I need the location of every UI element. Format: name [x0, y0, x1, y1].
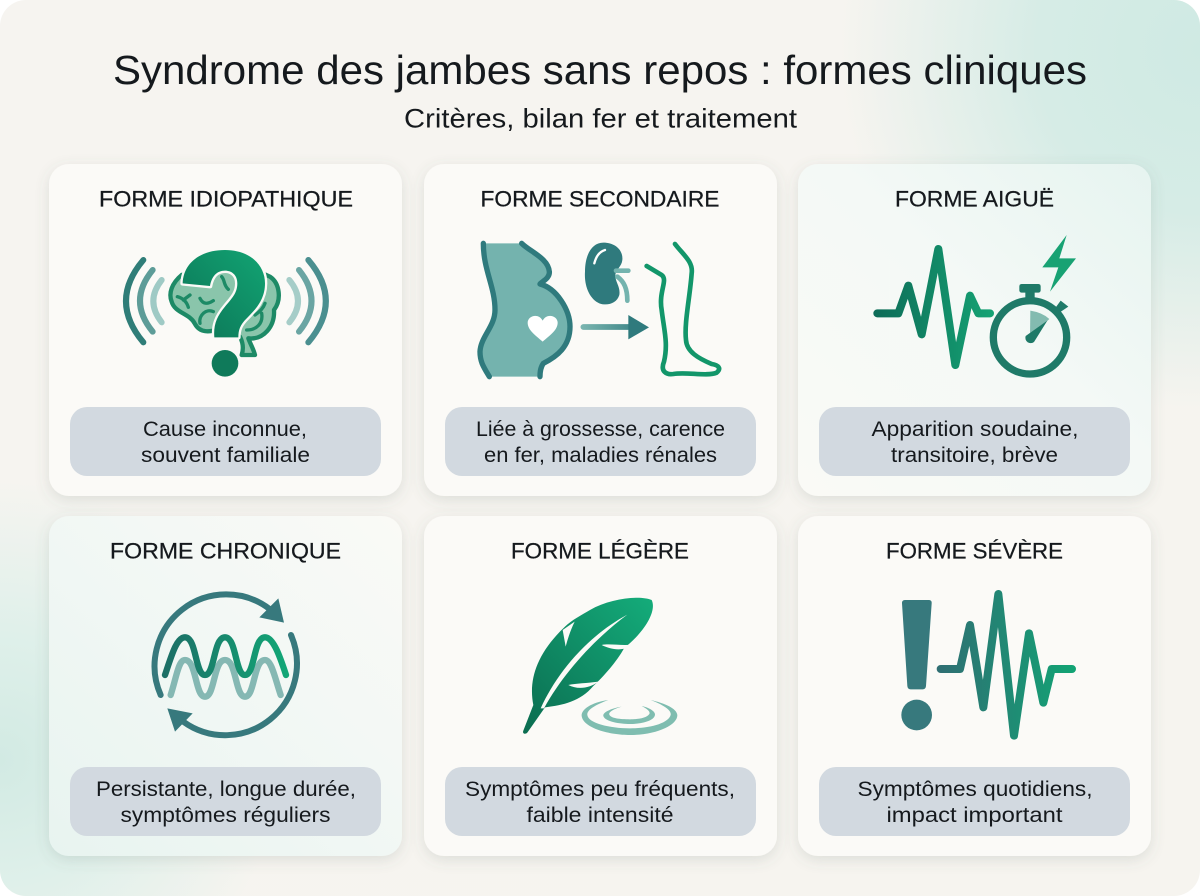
heading: forme secondaire: FORME SECONDAIRE — [480, 186, 720, 212]
pill: description — [819, 767, 1130, 836]
pill: description — [70, 767, 381, 836]
pill: description: symptômes réguliers — [120, 804, 330, 827]
panel: forme secondaire — [424, 164, 777, 496]
icon: cycle with waves — [155, 594, 297, 735]
heading: forme sévère: FORME SÉVÈRE — [886, 538, 1063, 564]
pill: description: Cause inconnue, — [143, 418, 307, 441]
panel: forme aiguë — [798, 164, 1151, 496]
heading: forme aiguë: FORME AIGUË — [895, 186, 1054, 212]
pill: description — [445, 767, 756, 836]
pill: description: faible intensité — [526, 804, 674, 827]
panel: forme légère — [424, 516, 777, 856]
heading: forme idiopathique: FORME IDIOPATHIQUE — [99, 186, 353, 212]
icon: exclamation and pulse — [901, 594, 1072, 736]
pill: description: Symptômes peu fréquents, — [465, 778, 735, 801]
pill: description: Persistante, longue durée, — [96, 778, 356, 801]
icon: brain with question mark and waves — [126, 250, 326, 377]
pill: description — [70, 407, 381, 476]
heading: forme légère: FORME LÉGÈRE — [511, 538, 689, 564]
pill: description: Symptômes quotidiens, — [858, 778, 1092, 801]
pill: description — [445, 407, 756, 476]
heading: forme chronique: FORME CHRONIQUE — [110, 538, 341, 564]
pill: description: en fer, maladies rénales — [484, 444, 717, 467]
pill: description: transitoire, brève — [891, 444, 1058, 467]
pill: description: Apparition soudaine, — [872, 418, 1078, 441]
icon: pulse, stopwatch and lightning — [877, 235, 1076, 374]
icon: feather and ripples — [523, 598, 677, 735]
subtitle: Critères, bilan fer et traitement — [404, 104, 798, 134]
panel: forme idiopathique — [49, 164, 402, 496]
pill: description: souvent familiale — [141, 444, 310, 467]
title: Syndrome des jambes sans repos : formes cliniques — [113, 47, 1087, 93]
icon: pregnancy, kidney and leg — [480, 243, 719, 377]
pill: description — [819, 407, 1130, 476]
pill: description: impact important — [886, 804, 1063, 827]
pill: description: Liée à grossesse, carence — [476, 418, 725, 441]
panel: forme chronique — [49, 516, 402, 856]
panel: forme sévère — [798, 516, 1151, 856]
